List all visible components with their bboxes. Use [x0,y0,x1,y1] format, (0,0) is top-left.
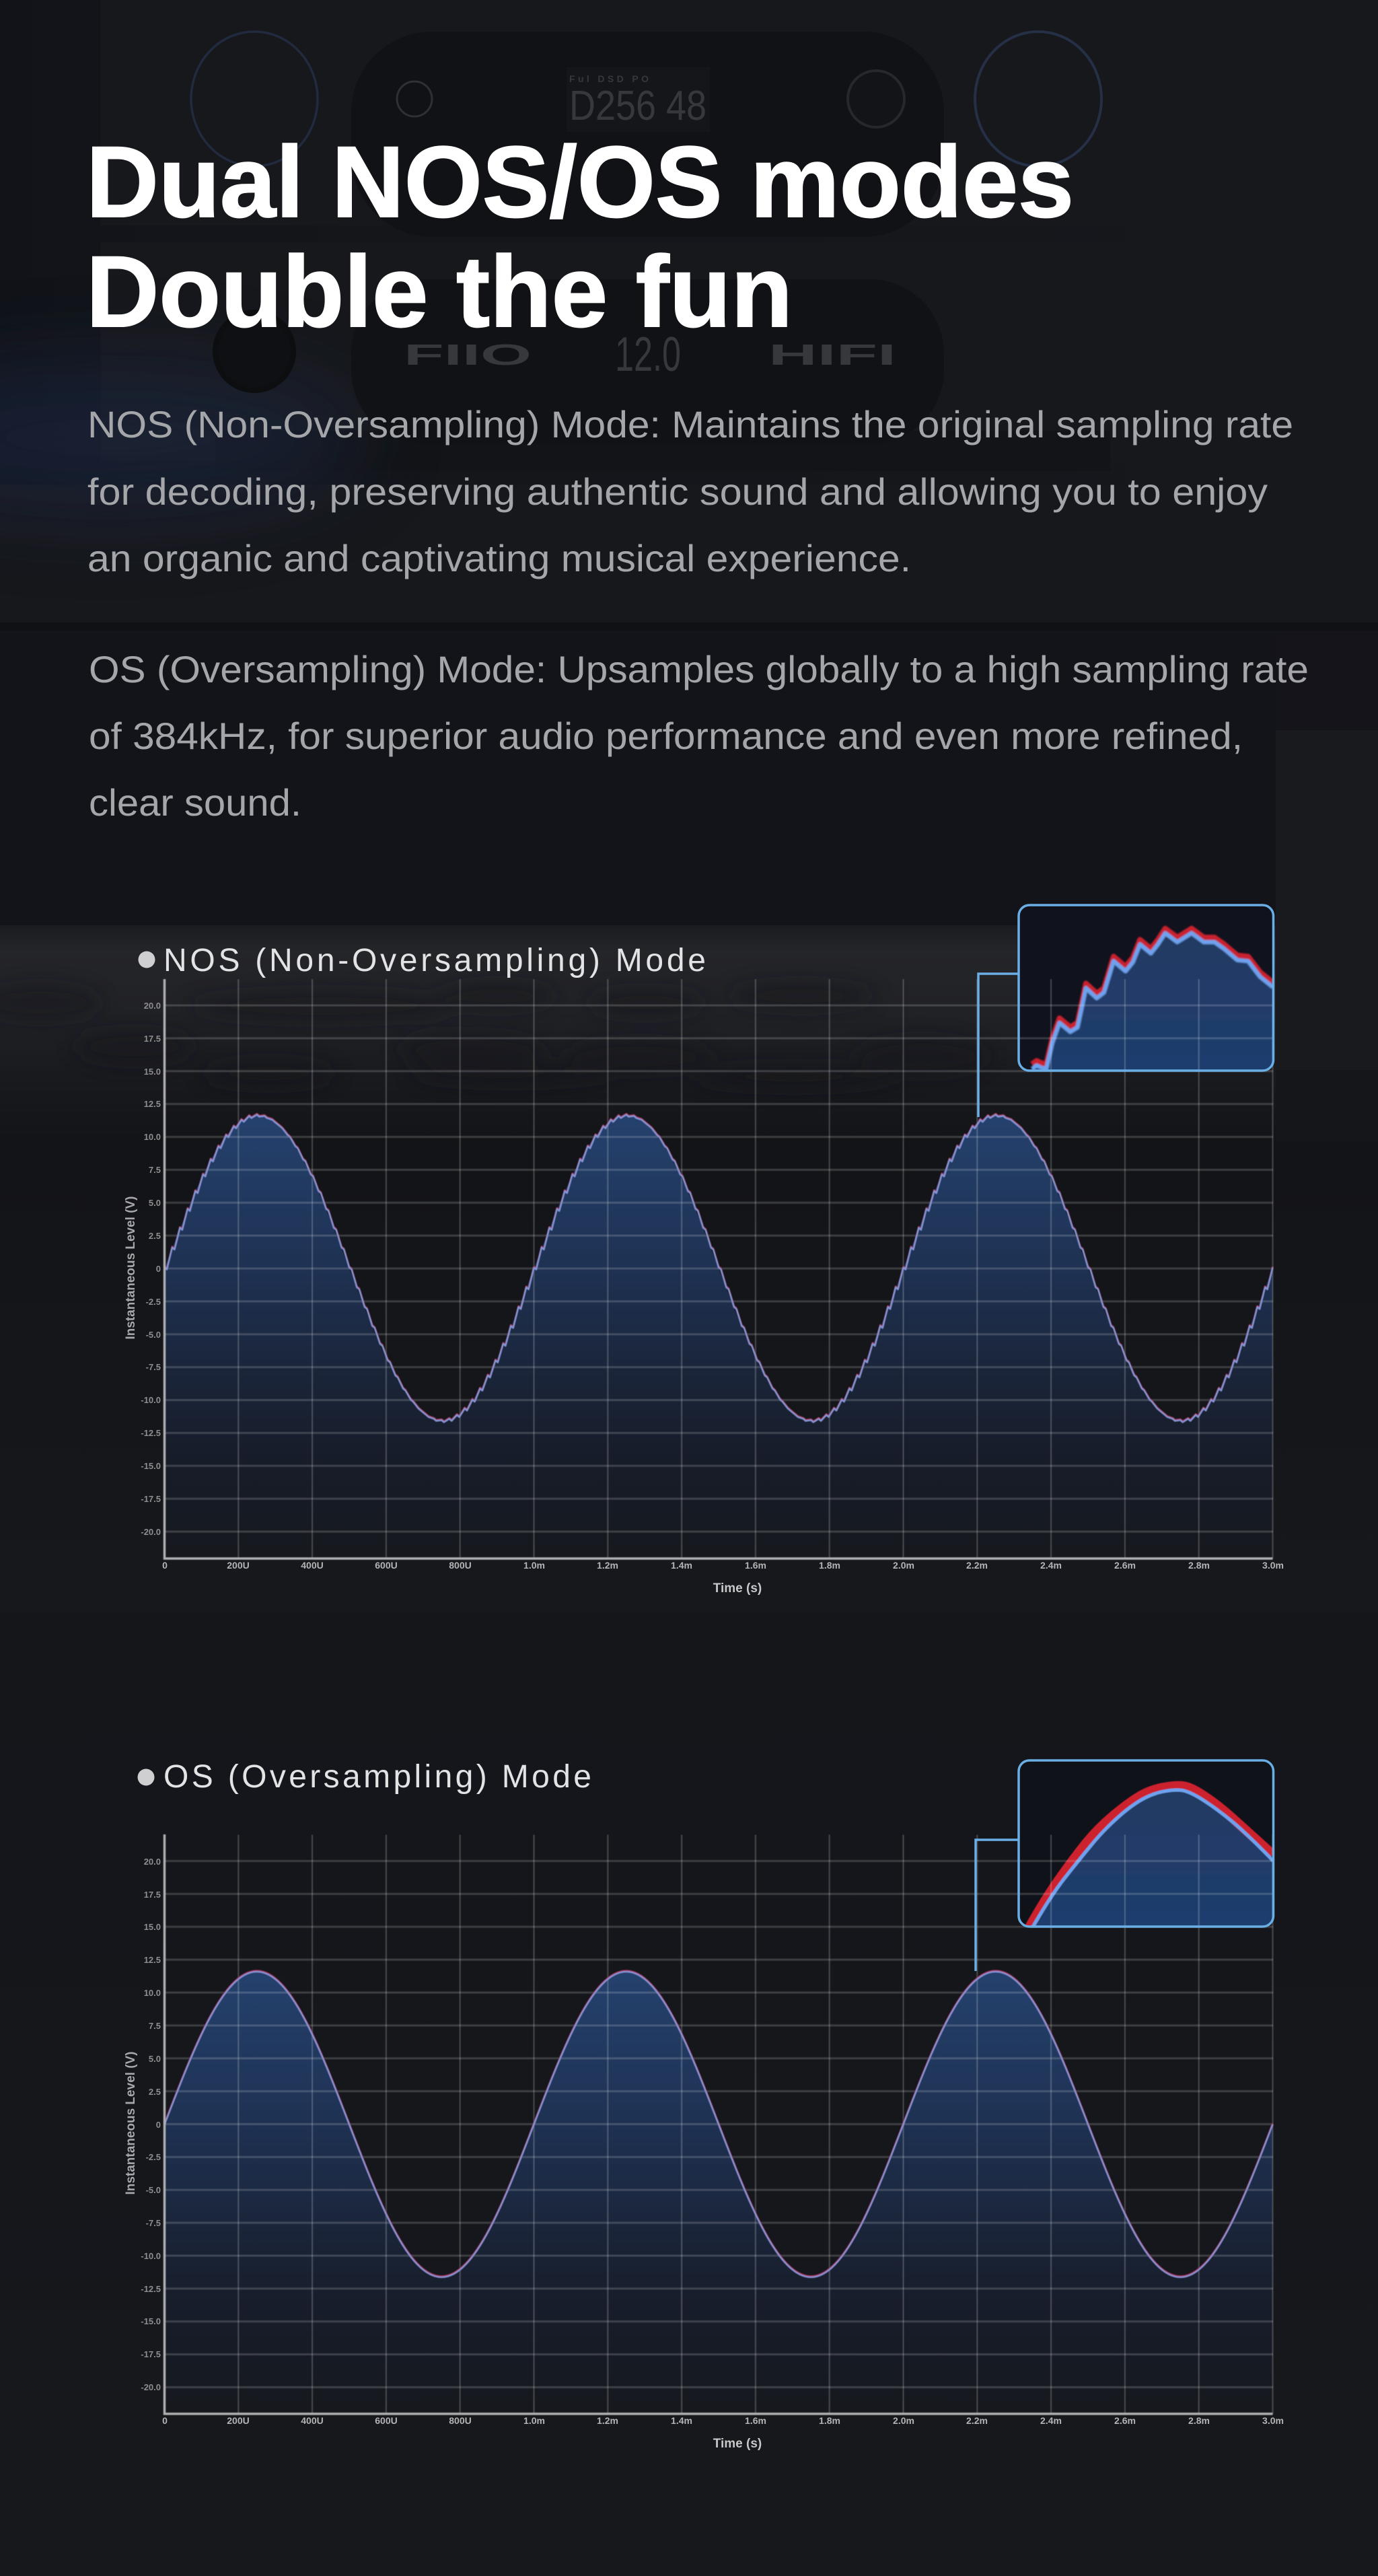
x-axis tick labels: 2.8m [1188,1560,1210,1571]
y-axis tick labels: -2.5 [146,2152,161,2162]
y-axis tick labels: 12.5 [144,1955,161,1965]
x-axis tick labels: 3.0m [1262,1560,1284,1571]
y-axis tick labels: -15.0 [141,1461,161,1471]
background photo: rear panel band [0,925,1378,1612]
y-axis tick labels: -12.5 [141,1428,161,1438]
y-axis tick labels: 0 [156,2120,161,2130]
x-axis tick labels [162,1560,1284,1571]
x-axis tick labels: 400U [301,1560,324,1571]
x-axis tick labels: 1.4m [671,1560,692,1571]
x-axis tick labels: 1.8m [819,1560,840,1571]
x-axis tick labels: 200U [227,1560,250,1571]
x-axis tick labels: 1.2m [597,1560,618,1571]
text block: NOS description [87,403,1293,579]
text block: OS description: of 384kHz, for superior audio performance and even more refined, [89,715,1243,757]
area under waveform [164,1972,1273,2414]
y-axis tick labels: 15.0 [144,1067,161,1077]
x-axis tick labels: 1.2m [597,2415,618,2426]
text block: OS description: OS (Oversampling) Mode: Upsamples globally to a high sampling rate [89,648,1309,690]
callout connector [978,974,1019,1117]
y-axis tick labels: -7.5 [146,2218,161,2228]
x-axis tick labels: 2.2m [966,2415,988,2426]
x-axis tick labels: 0 [162,1560,168,1571]
x-axis title: Time (s) [713,2437,762,2451]
x-axis tick labels: 200U [227,2415,250,2426]
text block: OS description: clear sound. [89,781,301,824]
y-axis tick labels: 12.5 [144,1099,161,1109]
y-axis tick labels: 20.0 [144,1001,161,1011]
y-axis tick labels: 2.5 [149,2087,161,2097]
x-axis tick labels [162,2415,1284,2426]
title: Dual NOS/OS modes [86,125,1074,238]
y-axis tick labels: 10.0 [144,1988,161,1998]
smooth waveform line [164,1970,1273,2277]
y-axis tick labels: -15.0 [141,2316,161,2326]
x-axis tick labels: 2.4m [1040,1560,1062,1571]
inset frame [1019,1760,1273,1927]
y-axis tick labels: -20.0 [141,1527,161,1537]
background photo: hi-fi device front panels: 12.0 [615,328,681,382]
axes [164,1834,1273,2414]
y-axis tick labels: -20.0 [141,2382,161,2392]
background photo: hi-fi device front panels: FIIO [404,338,532,371]
y-axis tick labels: -10.0 [141,2251,161,2261]
stepped waveform line [164,1114,1273,1423]
grid [164,979,1273,1559]
text block: OS description [89,648,1309,824]
y-axis tick labels [141,1857,161,2392]
y-axis tick labels [141,1001,161,1537]
x-axis tick labels: 3.0m [1262,2415,1284,2426]
axes [164,979,1273,1559]
x-axis tick labels: 1.0m [523,2415,545,2426]
y-axis tick labels: -5.0 [146,1330,161,1340]
y-axis tick labels: 20.0 [144,1857,161,1867]
heading: OS chart: OS (Oversampling) Mode [164,1759,591,1795]
x-axis tick labels: 800U [449,1560,472,1571]
y-axis title: Instantaneous Level (V) [124,2051,138,2195]
y-axis tick labels: 10.0 [144,1132,161,1142]
x-axis tick labels: 600U [375,2415,398,2426]
inset: zoomed OS peak [1025,1781,1272,1926]
y-axis tick labels: -5.0 [146,2185,161,2195]
y-axis tick labels: 15.0 [144,1922,161,1932]
area under waveform [164,1116,1273,1559]
x-axis title: Time (s) [713,1581,762,1596]
x-axis tick labels: 600U [375,1560,398,1571]
x-axis tick labels: 1.4m [671,2415,692,2426]
background photo: hi-fi device front panels: HIFI [768,338,896,371]
title: Double the fun [86,235,793,348]
inset: zoomed NOS peak [1020,925,1272,1070]
x-axis tick labels: 1.0m [523,1560,545,1571]
text block: NOS description: NOS (Non-Oversampling) Mode: Maintains the original sampling rate [87,403,1293,445]
inset frame [1019,905,1273,1071]
y-axis tick labels: 5.0 [149,1198,161,1208]
x-axis tick labels: 2.4m [1040,2415,1062,2426]
y-axis tick labels: 0 [156,1264,161,1274]
x-axis tick labels: 2.0m [893,1560,914,1571]
y-axis tick labels: -17.5 [141,1494,161,1504]
y-axis tick labels: -12.5 [141,2284,161,2294]
x-axis tick labels: 1.6m [745,1560,766,1571]
background photo: hi-fi device front panels: D256 48 [569,83,706,129]
heading: NOS chart: NOS (Non-Oversampling) Mode [164,943,706,978]
chart: OS waveform [124,1760,1284,2451]
y-axis tick labels: 7.5 [149,2021,161,2031]
text block: NOS description: an organic and captivating musical experience. [87,537,911,579]
y-axis title: Instantaneous Level (V) [124,1196,138,1339]
x-axis tick labels: 2.8m [1188,2415,1210,2426]
background photo: hi-fi device front panels: Ful DSD PO [569,73,649,84]
y-axis tick labels: 17.5 [144,1890,161,1900]
x-axis tick labels: 800U [449,2415,472,2426]
grid [164,1834,1273,2414]
x-axis tick labels: 400U [301,2415,324,2426]
x-axis tick labels: 1.8m [819,2415,840,2426]
y-axis tick labels: 17.5 [144,1034,161,1044]
x-axis tick labels: 2.6m [1114,1560,1136,1571]
x-axis tick labels: 1.6m [745,2415,766,2426]
x-axis tick labels: 2.0m [893,2415,914,2426]
title [86,125,1074,348]
y-axis tick labels: 5.0 [149,2054,161,2064]
y-axis tick labels: 7.5 [149,1165,161,1175]
y-axis tick labels: 2.5 [149,1231,161,1241]
background photo: hi-fi device front panels [0,0,1378,1218]
x-axis tick labels: 0 [162,2415,168,2426]
y-axis tick labels: -2.5 [146,1297,161,1307]
text block: NOS description: for decoding, preserving authentic sound and allowing you to enjoy [87,470,1268,513]
chart: NOS waveform [124,905,1284,1596]
x-axis tick labels: 2.6m [1114,2415,1136,2426]
callout connector [976,1840,1019,1971]
x-axis tick labels: 2.2m [966,1560,988,1571]
y-axis tick labels: -10.0 [141,1395,161,1405]
y-axis tick labels: -17.5 [141,2349,161,2359]
y-axis tick labels: -7.5 [146,1362,161,1372]
